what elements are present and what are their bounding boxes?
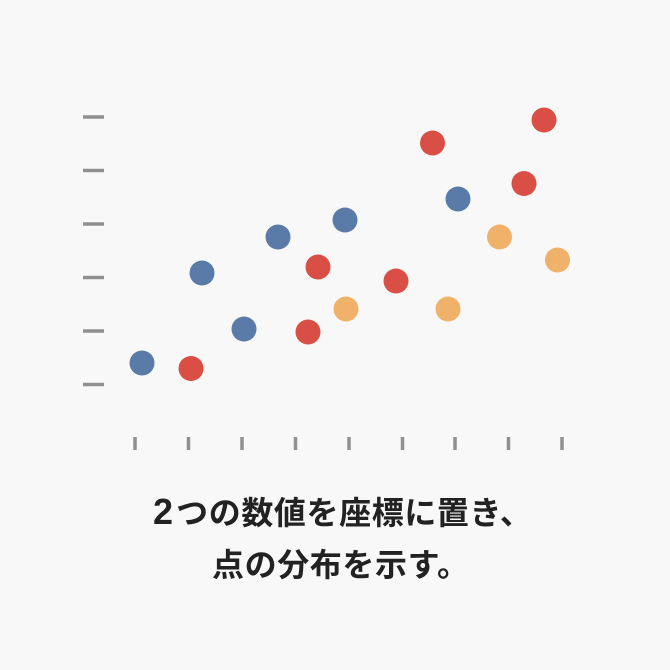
caption: 2つの数値を座標に置き、 — [153, 491, 532, 532]
blue points — [130, 186, 470, 376]
x axis ticks — [133, 437, 564, 450]
y axis ticks — [83, 115, 104, 386]
caption — [153, 491, 532, 583]
orange points — [334, 224, 570, 322]
caption: 点の分布を示す。 — [212, 547, 470, 583]
red points — [178, 108, 556, 381]
